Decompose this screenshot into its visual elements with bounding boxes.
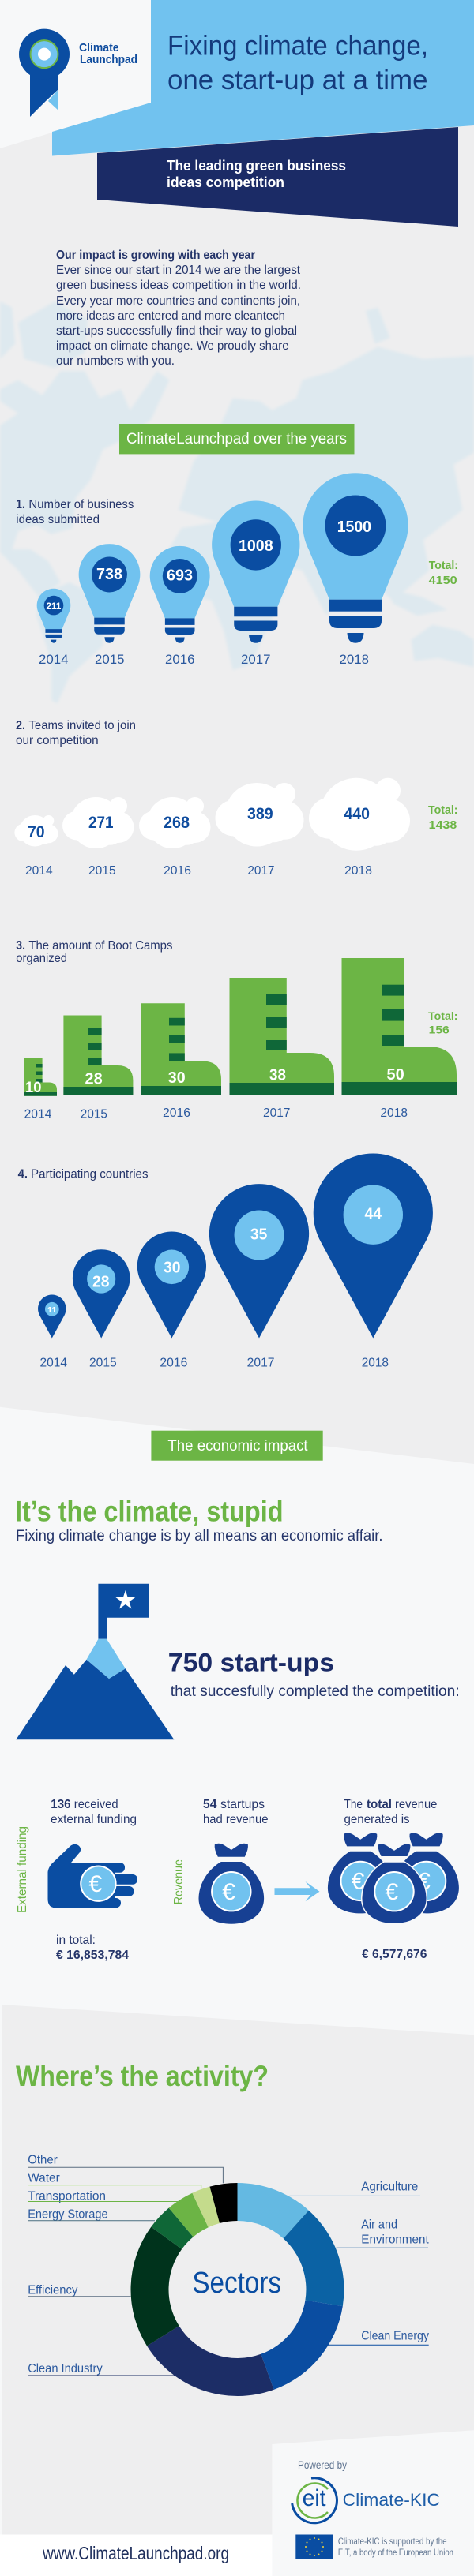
total: teams [428,803,458,832]
bulb 2015: 738 [96,566,122,583]
boot 2015: 2015 [81,1108,107,1121]
donut labels: left [28,2153,223,2376]
activity section background [2,2005,474,2576]
sub heading: Fixing climate change is by all means an economic affair. [16,1528,382,1544]
boot 2017: 2017 [263,1106,290,1120]
bulb 2014 [37,589,70,667]
footer strip [0,2535,273,2576]
text: revenue stat [203,1798,269,1826]
pin 2015: 28 [92,1274,109,1291]
pin 2017 [209,1184,309,1369]
title: one start-up at a time [167,65,428,95]
icon: hand with coin [47,1844,137,1908]
chart heading: countries: 4. [18,1168,28,1181]
donut labels: right: Air and [361,2218,397,2231]
text: external funding stat: external funding [51,1813,137,1826]
boot 2016 [141,1003,221,1120]
cloud 2018 [309,778,410,878]
boot 2016: 2016 [163,1106,190,1120]
bulb 2015: 2015 [95,652,125,667]
pin 2017: 35 [250,1226,267,1244]
text: revenue stat: had revenue [203,1813,269,1826]
icon: mountain with flag [16,1584,174,1739]
subtitle: ideas competition [167,174,284,190]
right bag [393,1833,459,1913]
section heading: economic impact: The economic impact [167,1437,308,1455]
funding total: in total: [56,1934,96,1947]
boot 2017: 38 [269,1067,286,1084]
chart heading: boot camps: organized [16,952,67,965]
boot chart: boot camps [24,958,457,1121]
cloud 2018: 2018 [344,864,372,878]
cloud 2017: 2017 [247,864,275,878]
donut labels: left: Transportation [28,2190,106,2203]
pin 2018: 2018 [362,1356,389,1369]
cloud 2015 [62,797,134,878]
donut labels: right: Environment [361,2233,429,2246]
pin 2014: 11 [47,1306,57,1315]
logo text: climate-kic: Climate-KIC [343,2490,440,2510]
total: teams: 1438 [429,818,457,832]
bulb 2017: 2017 [241,652,270,667]
boot 2017 [229,978,334,1120]
donut labels: right [290,2180,429,2345]
logo: Launchpad [80,53,137,66]
bulb 2016 [150,546,210,667]
segment: clean industry [147,2326,274,2396]
pin 2016: 2016 [160,1356,187,1369]
intro text block: Ever since our start in 2014 we are the largest [56,264,301,277]
stat: 750 start-ups: 750 start-ups [168,1649,334,1677]
bulb 2015 [79,544,140,667]
bulb chart: business ideas [37,473,408,667]
left bag [328,1833,393,1913]
right bag: € [417,1869,431,1895]
pin 2018: 44 [365,1205,382,1222]
donut labels: right: Clean Energy [361,2330,429,2342]
cloud 2016: 2016 [164,864,191,878]
intro text block: Our impact is growing with each year [56,249,255,262]
icon: money bag: € [222,1879,235,1905]
boot 2014: 10 [25,1080,41,1096]
cloud 2015: 271 [88,814,114,832]
chart heading: boot camps: The amount of Boot Camps [28,939,172,953]
segment: water [192,2187,220,2227]
revenue total: € 6,577,676 [362,1948,427,1961]
bulb 2018 [303,473,408,667]
text: total revenue stat: The [344,1798,363,1811]
subtitle: The leading green business [167,157,346,174]
title banner [52,0,474,156]
cloud 2014 [14,815,58,878]
icon: hand with coin: € [88,1871,103,1897]
pin 2014 [38,1295,67,1369]
boot 2014: 2014 [24,1108,52,1121]
donut labels: left: Clean Industry [28,2362,103,2376]
left bag: € [352,1869,365,1895]
chart heading: business ideas: ideas submitted [16,513,100,526]
bulb 2018: 1500 [337,519,371,536]
intro text block [56,249,301,368]
cloud 2014: 2014 [25,864,53,878]
bulb 2018: 2018 [340,652,369,667]
intro text block: start-ups successfully find their way to global [56,324,297,338]
text: external funding stat: 136 [51,1798,71,1811]
chart heading: business ideas: Number of business [28,498,134,511]
centre bag: € [386,1879,398,1905]
header panel [0,0,474,227]
cloud 2017 [215,783,303,878]
donut labels: left: Other [28,2153,58,2167]
logo: eit [292,2478,337,2523]
chart heading: countries: Participating countries [31,1168,149,1181]
bulb 2016: 693 [167,567,193,585]
pin 2015: 2015 [89,1356,117,1369]
pin 2018 [314,1154,433,1369]
boot 2014 [24,1058,57,1121]
text: revenue stat: 54 [203,1798,216,1811]
pin 2016 [137,1231,206,1369]
arrow [275,1881,319,1901]
chart heading: teams: 2. [16,719,25,732]
bulb 2014: 2014 [39,652,68,667]
chart heading: teams: Teams invited to join [28,719,136,732]
intro text block: more ideas are entered and more cleantech [56,309,285,323]
panel: powered by [272,2430,474,2576]
donut labels: left: Energy Storage [28,2208,108,2222]
intro text block: impact on climate change. We proudly share [56,339,289,353]
title [167,31,428,95]
intro text block: green business ideas competition in the world. [56,279,301,292]
text: revenue stat: startups [220,1798,265,1811]
boot 2016: 30 [168,1069,186,1087]
logo background [0,0,151,148]
powered by text: Powered by [298,2458,347,2471]
cloud 2017: 389 [247,805,273,823]
subtitle banner [97,127,458,227]
website url: www.ClimateLaunchpad.org [42,2543,229,2563]
bulb 2017: 1008 [239,537,273,555]
total: boot camps [428,1009,458,1036]
total: business ideas: 4150 [429,574,457,587]
segment: energy storage [151,2208,194,2249]
segment: efficiency [130,2227,182,2346]
label: external funding: External funding [16,1826,29,1913]
heading: it's the climate: It’s the climate, stupid [15,1496,284,1528]
section heading: over the years [119,424,354,454]
boot 2018: 50 [387,1066,404,1084]
funding total [56,1934,129,1962]
boot 2018: 2018 [380,1106,408,1120]
chart heading: business ideas [16,498,134,526]
text: external funding stat [51,1798,137,1826]
chart heading: teams: our competition [16,734,99,747]
boot 2015: 28 [85,1071,103,1088]
eu support text: Climate-KIC is supported by the [338,2536,447,2547]
boot 2015 [63,1015,133,1121]
pin chart: countries [38,1154,433,1369]
segment: other [210,2183,237,2223]
pin 2014: 2014 [40,1356,67,1369]
logo: Climate [79,41,118,54]
total: boot camps: 156 [429,1024,450,1036]
section heading: over the years: ClimateLaunchpad over the years [126,430,347,447]
chart heading: teams [16,719,136,747]
title: Fixing climate change, [167,31,428,62]
total: business ideas: Total: [429,559,458,572]
cloud 2014: 70 [28,823,45,841]
cloud 2016: 268 [164,814,190,832]
background world map [0,301,474,703]
funding total: € 16,853,784 [56,1949,129,1962]
stat: 750 start-ups [168,1649,460,1700]
text: total revenue stat: total [367,1798,392,1811]
text: total revenue stat: revenue [395,1798,437,1811]
chart heading: business ideas: 1. [16,498,25,511]
logo: eit: eit [303,2485,326,2511]
total: teams: Total: [428,803,458,817]
economic section background [0,1407,474,2576]
cloud 2015: 2015 [88,864,116,878]
logo [19,29,137,117]
label: revenue: Revenue [172,1859,186,1904]
donut chart: sectors [130,2183,344,2396]
intro text block: our numbers with you. [56,354,175,368]
segment: clean energy [261,2301,343,2390]
bulb 2016: 2016 [165,652,194,667]
heading: where's the activity: Where’s the activity? [16,2060,269,2092]
total: boot camps: Total: [428,1009,458,1022]
segment: transportation [169,2193,209,2237]
stat: 750 start-ups: that succesfully completed the competition: [171,1683,460,1700]
icon: money bag [198,1844,264,1924]
total: business ideas [429,559,458,587]
text: external funding stat: received [74,1798,118,1811]
chart heading: boot camps: 3. [16,939,25,953]
cloud 2018: 440 [344,805,370,823]
pin 2017: 2017 [247,1356,275,1369]
text: total revenue stat: generated is [344,1813,410,1826]
cloud 2016 [139,797,210,878]
subtitle [167,157,346,190]
donut labels: left: Water [28,2172,60,2185]
centre bag [362,1844,427,1924]
icon: three money bags [328,1833,459,1924]
cloud chart: teams [14,778,410,878]
pin 2015 [73,1249,130,1369]
section heading: economic impact [151,1431,323,1461]
chart heading: boot camps [16,939,172,965]
boot 2018 [341,958,457,1120]
intro text block: Every year more countries and continents join, [56,294,300,308]
text: total revenue stat [344,1798,437,1826]
donut labels: right: Agriculture [361,2180,418,2193]
segment: agriculture [237,2183,309,2238]
bulb 2014: 211 [46,601,62,612]
icon: eu flag [295,2535,333,2559]
donut labels: left: Efficiency [28,2283,77,2297]
pin 2016: 30 [164,1260,180,1277]
centre label: Sectors [192,2267,281,2300]
bulb 2017 [212,501,299,667]
eu support text [338,2536,453,2558]
segment: air and environment [284,2211,344,2306]
